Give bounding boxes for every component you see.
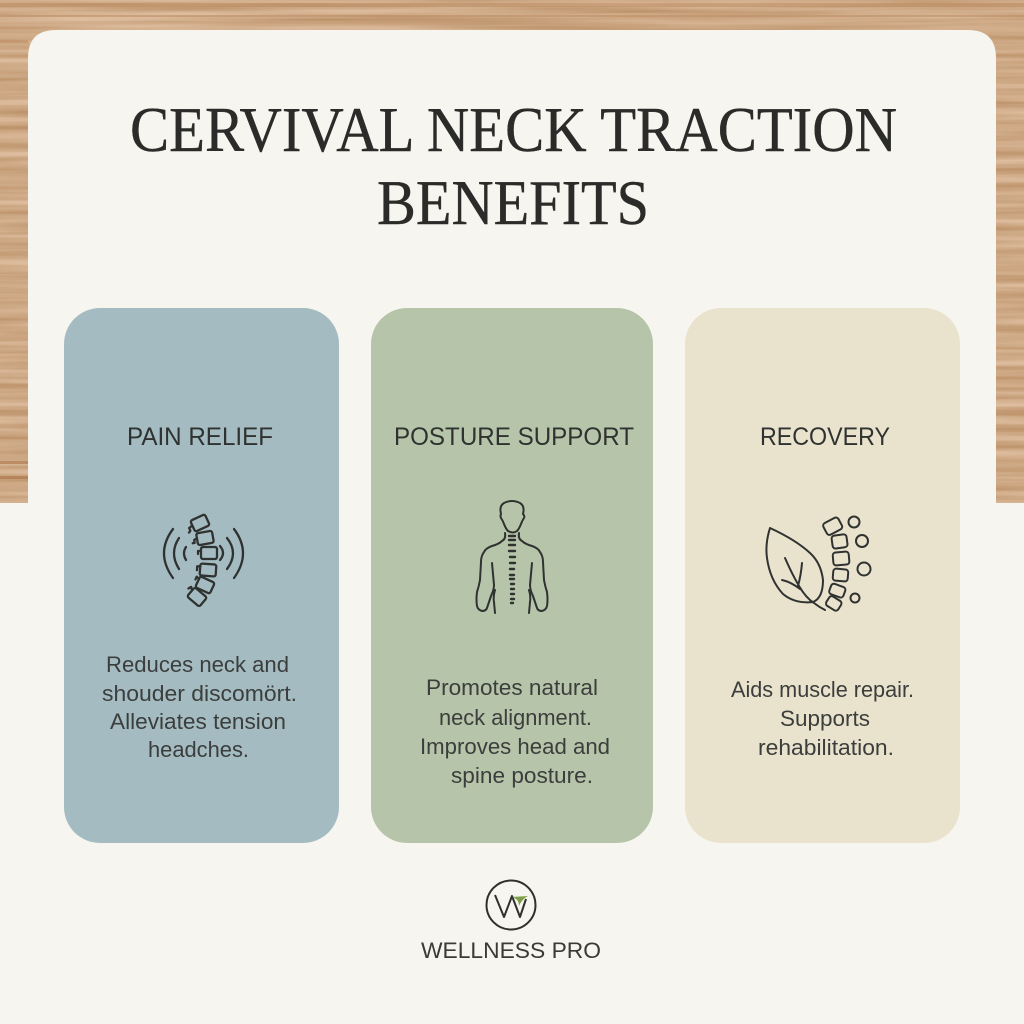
title xyxy=(130,94,897,238)
heading: recovery: RECOVERY xyxy=(760,423,890,451)
panel: posture support xyxy=(371,308,653,843)
title: CERVIVAL NECK TRACTION xyxy=(130,94,897,165)
panel: recovery xyxy=(685,308,960,843)
logo: wellness pro xyxy=(421,880,601,963)
icon: leaf and vertebrae xyxy=(766,516,870,612)
body text: recovery: rehabilitation. xyxy=(758,735,894,760)
body text: pain relief: headches. xyxy=(148,737,249,762)
body text: pain relief: Reduces neck and xyxy=(106,652,289,677)
title: BENEFITS xyxy=(377,167,649,238)
body text: pain relief: Alleviates tension xyxy=(110,709,286,734)
body text: pain relief: shouder discomört. xyxy=(102,681,297,706)
wood background xyxy=(0,0,1024,503)
body text: posture support: neck alignment. xyxy=(439,705,592,730)
body text: posture support: Improves head and xyxy=(420,734,610,759)
body text: posture support: Promotes natural xyxy=(426,675,598,700)
body text: pain relief xyxy=(102,652,297,762)
icon: human torso with spine xyxy=(476,501,548,613)
icon: spine with pain waves xyxy=(164,514,243,607)
panel: pain relief xyxy=(64,308,339,843)
logo mark xyxy=(486,880,536,930)
body text: posture support: spine posture. xyxy=(451,763,593,788)
body text: recovery: Aids muscle repair. xyxy=(731,677,914,702)
body text: posture support xyxy=(420,675,610,788)
heading: pain relief: PAIN RELIEF xyxy=(127,423,273,451)
heading: posture support: POSTURE SUPPORT xyxy=(394,423,634,451)
body text: recovery xyxy=(731,677,914,760)
body text: recovery: Supports xyxy=(780,706,870,731)
logo wordmark: WELLNESS PRO xyxy=(421,938,601,963)
